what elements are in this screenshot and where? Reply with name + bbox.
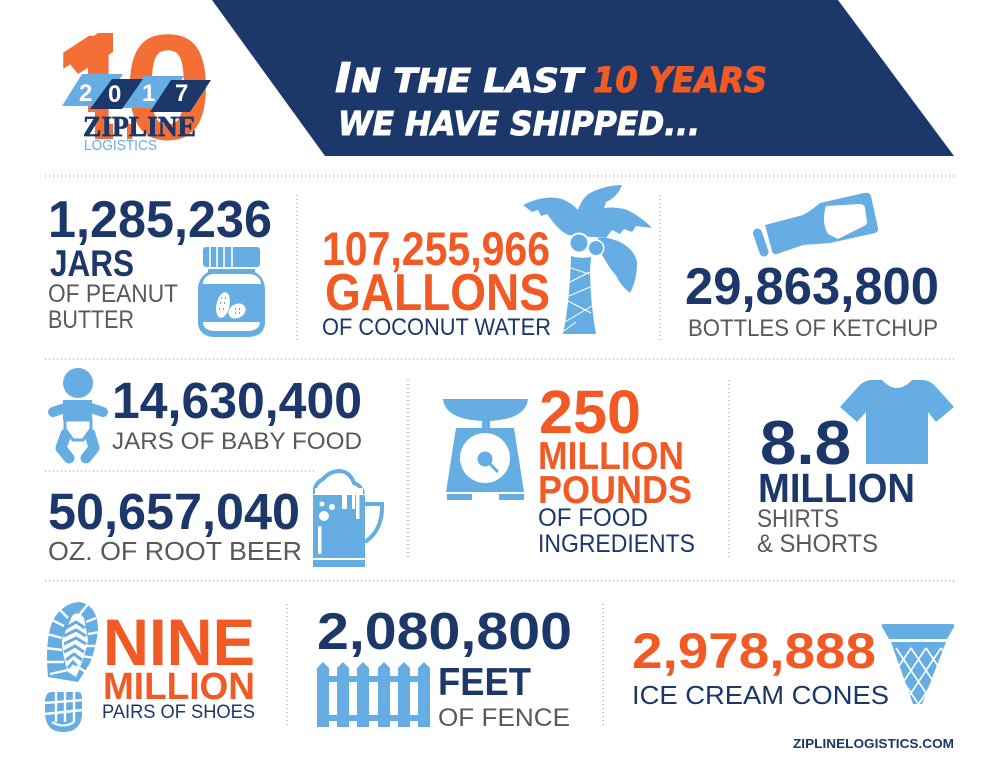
- panel: food ingredients: MILLION: [538, 435, 684, 478]
- panel: ketchup: BOTTLES OF KETCHUP: [688, 315, 938, 342]
- icon: baby: [53, 368, 103, 458]
- panel: food ingredients: INGREDIENTS: [538, 530, 695, 558]
- panel: shirts: [757, 380, 954, 558]
- panel: peanut butter: OF PEANUT: [48, 280, 178, 308]
- icon: ice cream cone: [882, 624, 954, 704]
- panel: root beer: OZ. OF ROOT BEER: [48, 536, 302, 566]
- panel: ketchup: 29,863,800: [685, 258, 939, 316]
- panel: coconut water: OF COCONUT WATER: [322, 314, 551, 341]
- panel: root beer: 50,657,040: [48, 483, 300, 540]
- panel: ice cream cones: [634, 624, 954, 704]
- title line 2: WE HAVE SHIPPED...: [338, 104, 700, 143]
- panel: food ingredients: [443, 378, 695, 558]
- panel: food ingredients: POUNDS: [538, 469, 692, 512]
- panel: shoes: [44, 602, 255, 732]
- panel: peanut butter: 1,285,236: [48, 191, 272, 249]
- header banner: [212, 0, 954, 156]
- panel: coconut water: GALLONS: [325, 264, 550, 322]
- title line 1: IN THE LAST: [335, 54, 586, 102]
- panel: baby food: [53, 368, 362, 458]
- footer website: ZIPLINELOGISTICS.COM: [793, 736, 954, 751]
- logo: Zipline Logistics 10 year badge: ZIPLINE: [83, 111, 196, 143]
- logo: Zipline Logistics 10 year badge: 0: [108, 81, 121, 108]
- panel: peanut butter: BUTTER: [48, 306, 134, 334]
- panel: shoes: MILLION: [103, 666, 255, 708]
- panel: shirts: MILLION: [758, 465, 915, 511]
- panel: peanut butter: [48, 191, 272, 337]
- icon: boot print: [44, 602, 100, 732]
- panel: ice cream cones: ICE CREAM CONES: [632, 680, 889, 710]
- logo: Zipline Logistics 10 year badge: 7: [175, 80, 188, 107]
- panel: shirts: & SHORTS: [757, 530, 878, 558]
- panel: shoes: PAIRS OF SHOES: [102, 702, 255, 723]
- panel: shirts: 8.8: [760, 409, 851, 478]
- logo: Zipline Logistics 10 year badge: LOGISTICS: [84, 138, 157, 154]
- logo: Zipline Logistics 10 year badge: 0: [124, 3, 212, 171]
- icon: kitchen scale: [443, 399, 528, 500]
- icon: beer mug: [313, 471, 382, 567]
- icon: picket fence: [317, 662, 430, 727]
- icon: ketchup bottle: [758, 193, 878, 254]
- title highlight: 10 YEARS: [593, 61, 767, 101]
- panel: fence: FEET: [438, 661, 531, 704]
- panel: shirts: SHIRTS: [757, 505, 839, 533]
- logo: Zipline Logistics 10 year badge: 1: [142, 80, 155, 107]
- panel: ice cream cones: 2,978,888: [632, 623, 876, 679]
- icon: peanut butter jar: [198, 247, 265, 337]
- panel: coconut water: [322, 185, 652, 341]
- panel: fence: OF FENCE: [438, 704, 570, 732]
- logo: Zipline Logistics 10 year badge: 1: [53, 3, 136, 171]
- panel: food ingredients: OF FOOD: [538, 504, 648, 532]
- panel: coconut water: 107,255,966: [322, 222, 550, 275]
- icon: t-shirt: [840, 380, 954, 464]
- icon: palm tree: [523, 185, 652, 334]
- panel: food ingredients: 250: [539, 378, 641, 446]
- panel: root beer: [48, 471, 382, 567]
- panel: ketchup: [685, 193, 939, 342]
- panel: peanut butter: JARS: [50, 243, 134, 284]
- panel: fence: [317, 603, 572, 732]
- panel: baby food: JARS OF BABY FOOD: [112, 428, 362, 455]
- logo: Zipline Logistics 10 year badge: [53, 3, 212, 171]
- panel: shoes: NINE: [103, 605, 255, 679]
- logo: Zipline Logistics 10 year badge: 2: [79, 80, 92, 107]
- panel: fence: 2,080,800: [317, 603, 572, 661]
- panel: baby food: 14,630,400: [112, 372, 362, 429]
